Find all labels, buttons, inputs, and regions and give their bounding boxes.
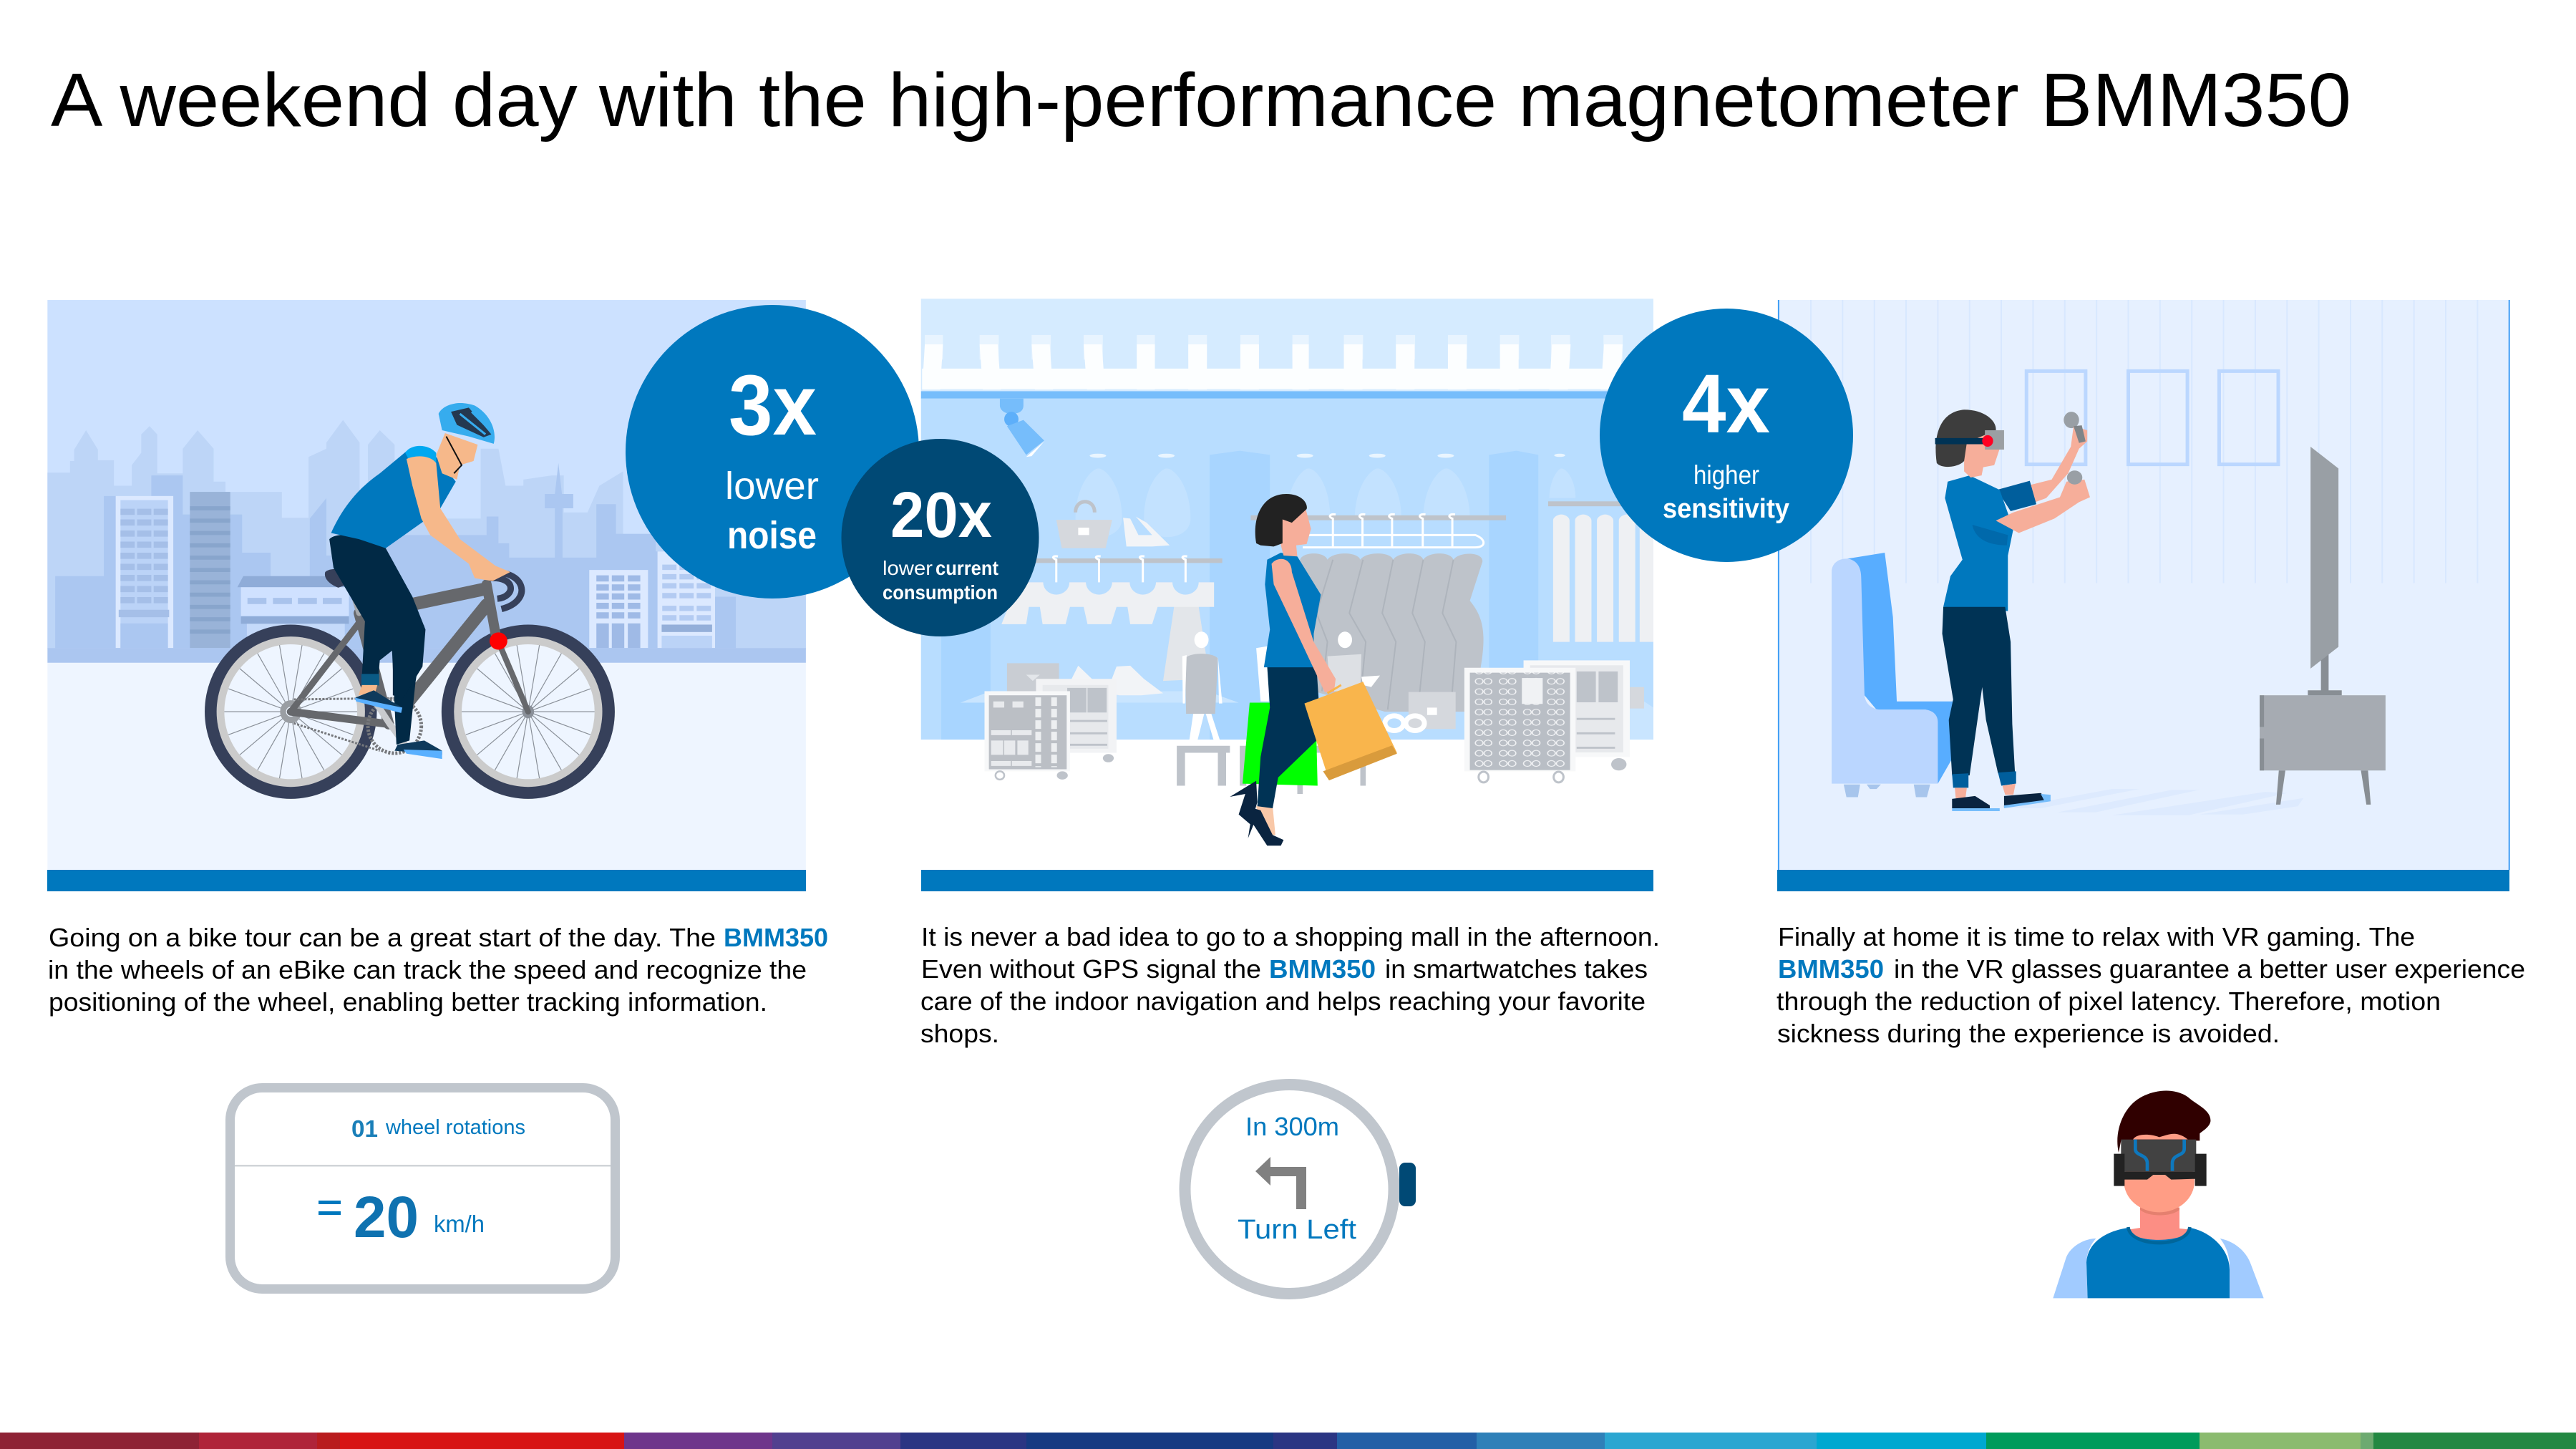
- center rail: [1250, 515, 1506, 520]
- handbag: [1056, 502, 1112, 548]
- right buildings: [589, 551, 715, 648]
- road band: [47, 648, 806, 663]
- text block: VR: [1777, 922, 2525, 1048]
- bike frame: [291, 582, 528, 724]
- storefront: [921, 399, 1653, 740]
- face and neck: [1281, 508, 1311, 556]
- striped tower: [190, 492, 230, 648]
- shoe: back heel: [1230, 781, 1258, 825]
- text block: VR: through the reduction of pixel latency. Therefore, motion: [1777, 987, 2441, 1016]
- badge: 4x higher sensitivity: sensitivity: [1663, 494, 1789, 524]
- glasses cart: [1464, 668, 1575, 782]
- counter bag: [1409, 692, 1456, 729]
- display: wheel speed: 01: [351, 1115, 378, 1142]
- back cart left: [1036, 679, 1117, 762]
- sunglasses: [1385, 716, 1424, 731]
- text block: shopping: shops.: [920, 1019, 999, 1048]
- panel: shopping mall illustration: [921, 299, 1653, 870]
- trousers: [1258, 667, 1319, 808]
- glass columns: [941, 451, 1538, 740]
- text block: VR: Finally at home it is time to relax with VR gaming. The: [1778, 922, 2415, 951]
- badge: 3x lower noise: [626, 305, 919, 598]
- badge: 3x lower noise: lower: [725, 465, 819, 508]
- display platform: [961, 691, 1653, 740]
- text block: bike: [48, 923, 828, 1017]
- second mannequin: [1256, 631, 1380, 702]
- light cones: [1076, 468, 1575, 537]
- shoes shelf: [1123, 517, 1170, 546]
- shoes: [1952, 793, 2051, 811]
- mannequin: [1182, 631, 1223, 751]
- rider leg: [329, 535, 425, 697]
- long dress: [1163, 607, 1210, 681]
- blue bar panel 3: [1777, 870, 2509, 891]
- far leg: [392, 626, 424, 745]
- badge: 20x lower current consumption: consumption: [883, 581, 998, 604]
- dress: [1264, 553, 1321, 667]
- hanging tubes: [1553, 515, 1653, 642]
- floor: [921, 740, 1653, 870]
- low building: [238, 576, 350, 648]
- ankles: [1955, 784, 2016, 800]
- arm: [1272, 559, 1336, 692]
- tv stand: [2308, 654, 2342, 695]
- panel: bike tour illustration: [47, 300, 806, 870]
- badge: 20x lower current consumption: 20x: [890, 480, 992, 551]
- upper arm raised: [2027, 426, 2087, 502]
- right rail: [1548, 501, 1653, 506]
- text block: shopping: BMM350: [1269, 954, 1376, 984]
- front wheel: [442, 624, 615, 799]
- badge: 3x lower noise: 3x: [729, 357, 817, 453]
- shoes on platform: [1071, 666, 1163, 695]
- far skyline: [47, 420, 806, 648]
- text block: bike: Going on a bike tour can be a great start of the day. The: [49, 923, 716, 952]
- badge: 20x lower current consumption: current: [935, 557, 998, 579]
- dress dividers: [1316, 560, 1456, 711]
- badge: 20x lower current consumption: lower: [883, 557, 933, 579]
- blue fascia: [921, 391, 1653, 399]
- text block: shopping: Even without GPS signal the: [921, 954, 1261, 984]
- vr headset: [1935, 430, 2004, 450]
- leg cuff: [361, 674, 379, 685]
- shirt fold: [1973, 525, 2008, 546]
- awning: [922, 335, 1629, 389]
- rider jersey: [331, 449, 456, 548]
- envelope bag: [1007, 663, 1059, 693]
- badge: 20x lower current consumption: [842, 439, 1039, 636]
- smartwatch: [1185, 1085, 1416, 1294]
- text block: bike: positioning of the wheel, enabling better tracking information.: [49, 987, 767, 1017]
- trousers: [1943, 607, 2015, 775]
- title: A weekend day with the high-performance magnetometer BMM350: [51, 58, 2351, 142]
- hair: [1935, 410, 1996, 467]
- road: [47, 663, 806, 870]
- blue bar panel 1: [47, 870, 806, 891]
- vr user icon: [2053, 1091, 2264, 1298]
- smartwatch: In 300m: [1245, 1112, 1339, 1141]
- badge: 4x higher sensitivity: higher: [1693, 460, 1759, 490]
- smartwatch: Turn Left: [1238, 1215, 1356, 1245]
- hair: [1255, 494, 1307, 546]
- top controller handle: [2074, 425, 2086, 443]
- display: wheel speed: km/h: [434, 1211, 485, 1237]
- hanging tops: [1001, 582, 1214, 624]
- ankle: [359, 685, 377, 695]
- sensor dot: [490, 632, 507, 649]
- rider neck and face: [436, 433, 477, 480]
- chain and chainring: [293, 698, 422, 753]
- text block: VR: in the VR glasses guarantee a better user experience: [1894, 954, 2525, 984]
- rider arm: [407, 456, 510, 581]
- text block: bike: in the wheels of an eBike can track the speed and recognize the: [48, 955, 807, 984]
- back cart right: [1524, 660, 1644, 770]
- spot light: [1000, 399, 1044, 457]
- front shoe: [355, 690, 402, 713]
- badge: 3x lower noise: noise: [727, 514, 817, 557]
- top necklines: [1043, 570, 1199, 595]
- tv: [2310, 447, 2338, 669]
- picture frames: [2026, 371, 2278, 465]
- badge: 4x higher sensitivity: 4x: [1682, 357, 1770, 450]
- display stools: [1177, 746, 1366, 794]
- rear shoe: [394, 740, 442, 759]
- badge: 4x higher sensitivity: [1600, 309, 1853, 562]
- shirt: [1943, 475, 2013, 611]
- green shopping bag: [1243, 703, 1318, 785]
- rear wheel: [205, 624, 376, 799]
- text block: shopping: care of the indoor navigation and helps reaching your favorite: [920, 987, 1646, 1016]
- left rail: [1004, 558, 1223, 563]
- helmet: [439, 403, 495, 444]
- near skyline: [55, 475, 806, 648]
- text block: shopping: in smartwatches takes: [1385, 954, 1648, 984]
- ceiling lights: [1089, 454, 1565, 457]
- display: wheel speed: 20: [354, 1185, 419, 1250]
- display: wheel speed: wheel rotations: [385, 1116, 525, 1139]
- neck and face: [1964, 430, 2000, 478]
- text block: shopping: It is never a bad idea to go to a shopping mall in the afternoon.: [921, 922, 1660, 951]
- text block: VR: BMM350: [1778, 954, 1884, 984]
- sleeve: [1997, 481, 2036, 511]
- blue bar panel 2: [921, 870, 1653, 891]
- text block: shopping: [920, 922, 1660, 1048]
- rider sleeve: [405, 446, 436, 465]
- helmet strap: [446, 437, 462, 473]
- display: wheel speed: [230, 1088, 616, 1289]
- text block: VR: sickness during the experience is avoided.: [1777, 1019, 2280, 1048]
- cuffs: [1952, 771, 2016, 788]
- front cart left: [985, 691, 1070, 780]
- shoe: front heel: [1248, 808, 1283, 845]
- text block: bike: BMM350: [724, 923, 828, 952]
- near arm: [1996, 480, 2090, 533]
- orange shopping bag: [1304, 682, 1397, 780]
- tv tower: [545, 463, 573, 560]
- white office building: [116, 496, 173, 648]
- hangers: [1054, 556, 1187, 582]
- controller top: [2064, 412, 2079, 428]
- floor shadow: [2008, 789, 2303, 815]
- saddle: [325, 569, 353, 588]
- back leg skin: [1256, 806, 1275, 835]
- tv cabinet: [2260, 695, 2386, 805]
- dress hangers: [1303, 514, 1484, 548]
- colour strip: [0, 1433, 2576, 1449]
- crank: [375, 702, 409, 751]
- dress rack: [1300, 553, 1484, 712]
- panel: VR gaming illustration: [1779, 300, 2509, 870]
- handlebar: [490, 573, 522, 609]
- armchair: [1832, 553, 1953, 798]
- controller bottom: [2067, 470, 2082, 485]
- wall stripes: [1811, 300, 2477, 583]
